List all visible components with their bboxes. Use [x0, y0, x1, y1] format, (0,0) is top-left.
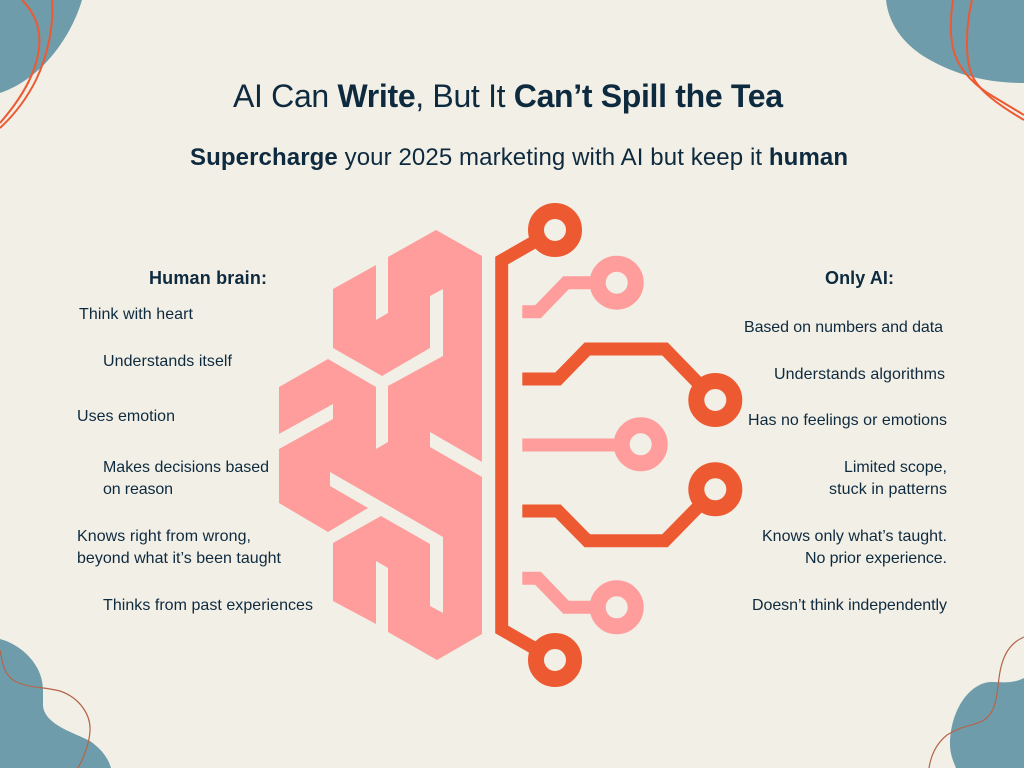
text: limited scope: [829, 459, 947, 498]
text: past experiences: Thinks from past experiences: [103, 597, 313, 614]
brain icon: [279, 230, 482, 660]
title: AI Can Write, But It Can’t Spill the Tea: [233, 78, 783, 114]
circuit branch 3: [522, 425, 660, 463]
circuit branch 1: [522, 264, 636, 312]
text: uses emotion: Uses emotion: [77, 408, 175, 425]
circuit branch 5: [522, 578, 636, 626]
subtitle: Supercharge your 2025 marketing with AI but keep it human: [190, 144, 848, 171]
text: knows right from wrong: beyond what it’s been taught: [77, 550, 282, 567]
decoration: top-right blob: [886, 0, 1024, 120]
text: knows only what's taught: No prior experience.: [805, 550, 947, 567]
decoration: top-left blob: [0, 0, 82, 128]
text: makes decisions: Makes decisions based: [103, 459, 269, 476]
panel: human brain list: [77, 268, 313, 614]
text: think with heart: Think with heart: [79, 306, 194, 323]
text: knows right from wrong: Knows right from wrong,: [77, 528, 251, 545]
decoration: bottom-right blob: [929, 637, 1024, 768]
text: knows only what's taught: Knows only what’s taught.: [762, 528, 947, 545]
circuit icon: [502, 211, 734, 679]
circuit branch 2: [522, 349, 734, 419]
heading: human brain: Human brain:: [149, 268, 267, 288]
heading: only AI: Only AI:: [825, 268, 894, 288]
text: knows only what's taught: [762, 528, 947, 567]
main spine with two end nodes: [502, 211, 574, 679]
circuit branch 4: [522, 470, 734, 541]
text: makes decisions: [103, 459, 269, 498]
text: knows right from wrong: [77, 528, 282, 567]
text: numbers and data: Based on numbers and data: [744, 319, 943, 336]
panel: only AI list: [744, 268, 947, 614]
decoration: bottom-left blob: [0, 639, 111, 768]
text: algorithms: Understands algorithms: [774, 366, 945, 383]
text: limited scope: Limited scope,: [844, 459, 947, 476]
text: no feelings: Has no feelings or emotions: [748, 412, 947, 429]
text: makes decisions: on reason: [103, 481, 173, 498]
text: doesn't think independently: Doesn’t think independently: [752, 597, 947, 614]
text: limited scope: stuck in patterns: [829, 481, 947, 498]
text: understands itself: Understands itself: [103, 353, 233, 370]
